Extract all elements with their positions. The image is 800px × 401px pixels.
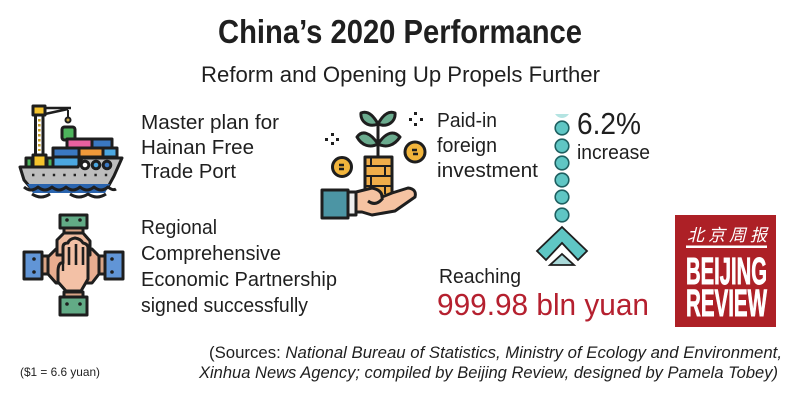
text: RCEP: Comprehensive bbox=[141, 243, 281, 265]
text: RCEP: signed successfully bbox=[141, 295, 308, 317]
icon: cargo ship bbox=[20, 106, 122, 197]
subtitle: Reform and Opening Up Propels Further bbox=[201, 62, 600, 87]
text: Hainan Free Trade Port: Trade Port bbox=[141, 161, 236, 183]
sources bbox=[198, 344, 782, 382]
sources: Xinhua News Agency; compiled by Beijing Review, designed by Pamela Tobey) bbox=[198, 364, 778, 382]
stat: 6.2% increase: increase bbox=[577, 142, 650, 164]
text: Hainan Free Trade Port: Master plan for bbox=[141, 112, 279, 134]
stat: reaching amount: Reaching bbox=[439, 266, 521, 288]
text: paid-in foreign investment: Paid-in bbox=[437, 110, 497, 132]
stat: reaching amount bbox=[437, 266, 649, 322]
stat: 6.2% increase: 6.2% bbox=[577, 106, 641, 141]
logo: Beijing Review bbox=[675, 215, 776, 327]
text: paid-in foreign investment: investment bbox=[437, 160, 538, 182]
logo: Beijing Review: 北京周报 bbox=[687, 221, 769, 246]
text: Hainan Free Trade Port bbox=[141, 112, 279, 183]
text: paid-in foreign investment bbox=[437, 110, 538, 182]
icon: upward arrow of dots bbox=[537, 114, 587, 265]
icon: hand holding plant and coins bbox=[322, 112, 425, 218]
stat: 6.2% increase bbox=[577, 106, 650, 164]
text: RCEP bbox=[141, 217, 337, 317]
title: China’s 2020 Performance bbox=[218, 13, 582, 50]
text: paid-in foreign investment: foreign bbox=[437, 135, 497, 157]
text: RCEP: Economic Partnership bbox=[141, 269, 337, 291]
text: Hainan Free Trade Port: Hainan Free bbox=[141, 137, 254, 159]
note: exchange rate: ($1 = 6.6 yuan) bbox=[20, 365, 100, 379]
icon: joined hands bbox=[24, 215, 123, 315]
text: RCEP: Regional bbox=[141, 217, 217, 239]
sources: (Sources: National Bureau of Statistics, Ministry of Ecology and Environment, bbox=[209, 344, 782, 362]
stat: reaching amount: 999.98 bln yuan bbox=[437, 287, 649, 322]
